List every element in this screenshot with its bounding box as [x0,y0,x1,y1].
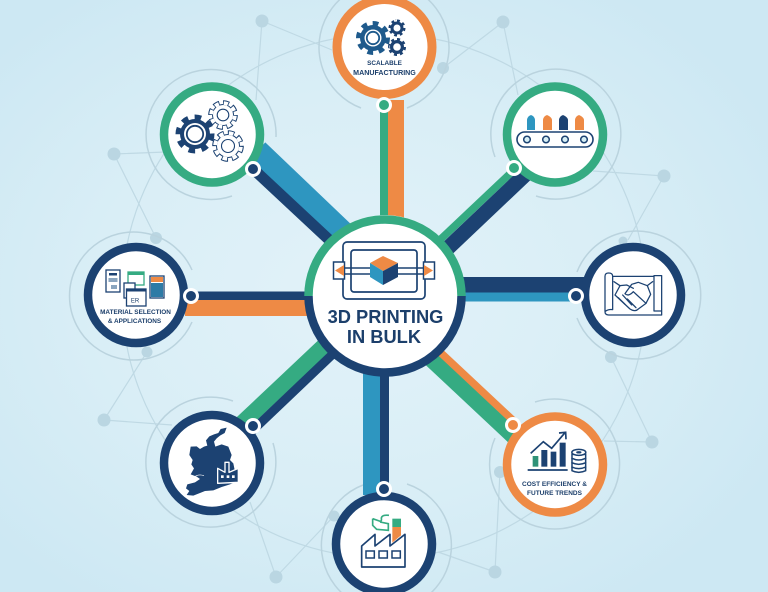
spoke: bottom right [421,338,518,438]
icon: factory with smoke [362,515,405,567]
spoke: top right [425,168,528,265]
hub title: 3D PRINTING [328,306,443,327]
spoke: top [380,100,404,225]
node: cost efficiency and future trends [507,416,603,512]
spoke: top left [250,151,345,250]
node: material selection and applications [88,247,184,343]
icon: factory [218,462,238,483]
connector dots [184,98,582,496]
icon: gears [358,21,404,54]
node: material selection and applications: & APPLICATIONS [108,318,162,325]
icon: bar chart and coins [528,432,586,472]
node: Ireland map with factory [164,415,260,511]
label: MATERIAL SELECTION [100,309,171,316]
icon: documents [106,270,164,306]
node: cost efficiency and future trends: FUTURE TRENDS [527,490,583,497]
spoke: left [185,292,310,316]
icon label: document: ER [131,298,140,304]
spoke: bottom [363,360,389,495]
spoke: bottom left [238,345,335,432]
node: scalable manufacturing [337,0,432,94]
spoke: right [460,277,585,302]
node: conveyor [507,86,603,182]
label: COST EFFICIENCY & [522,481,587,488]
central hub: 3D printing in bulk: IN BULK [347,326,422,347]
node: scalable manufacturing: MANUFACTURING [353,69,416,77]
icon: Ireland map [186,428,238,496]
node: partnership handshake [585,247,681,343]
icon: conveyor belt [517,115,593,147]
node: factory [336,496,432,592]
icon: three gears [178,102,242,160]
label: SCALABLE [367,60,403,67]
node: gears [164,86,260,182]
icon: handshake on blueprint [605,273,662,315]
icon: 3D printer with cube [334,242,434,299]
central hub: 3D printing in bulk [308,215,462,372]
